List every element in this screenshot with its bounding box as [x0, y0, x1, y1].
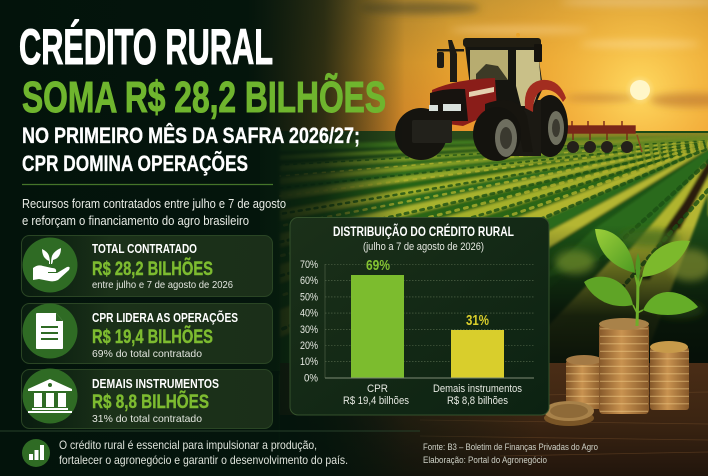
icon: bar chart — [29, 445, 44, 460]
background photo: wooden table — [280, 363, 708, 476]
footer note — [22, 438, 348, 467]
card: total contratado: TOTAL CONTRATADO — [92, 241, 197, 256]
card: demais instrumentos: 31% do total contratado — [92, 413, 202, 425]
bar chart: 40% — [300, 308, 318, 320]
category label: demais instrumentos: R$ 8,8 bilhões — [447, 395, 508, 407]
card: total contratado: R$ 28,2 BILHÕES — [92, 258, 213, 280]
coin stack: right — [650, 341, 689, 410]
bar chart — [300, 257, 534, 407]
card: CPR lidera as operações — [22, 304, 272, 364]
background photo: crop field — [260, 131, 708, 476]
bar chart: 10% — [300, 356, 318, 368]
card: CPR lidera as operações: CPR LIDERA AS OPERAÇÕES — [92, 310, 238, 325]
bar chart: 70% — [300, 259, 318, 271]
bar chart: 50% — [300, 291, 318, 303]
card: CPR lidera as operações: 69% do total contratado — [92, 348, 202, 360]
value: 69%: 69% — [366, 257, 390, 274]
category label: CPR: R$ 19,4 bilhões — [343, 395, 409, 407]
bar chart: 30% — [300, 324, 318, 336]
coin stacks and seedling — [544, 229, 698, 426]
bar: demais instrumentos — [451, 330, 504, 378]
category label: CPR — [343, 383, 409, 407]
category label: CPR: CPR — [367, 383, 388, 395]
card: total contratado: entre julho e 7 de agosto de 2026 — [92, 279, 233, 291]
table fade overlay — [280, 415, 540, 476]
background photo: tractor with implement — [395, 33, 642, 161]
source credits: Elaboração: Portal do Agronegócio — [423, 455, 547, 465]
intro text: e reforçam o financiamento do agro brasileiro — [22, 213, 249, 228]
title line 1: CRÉDITO RURAL — [19, 19, 273, 75]
flat coin — [544, 401, 594, 426]
tractor exhaust and mirror — [437, 40, 464, 82]
category label: demais instrumentos: Demais instrumentos — [433, 383, 522, 395]
subtitle line 2: CPR DOMINA OPERAÇÕES — [22, 151, 248, 176]
chart title: DISTRIBUIÇÃO DO CRÉDITO RURAL — [333, 224, 514, 239]
chart subtitle: (julho a 7 de agosto de 2026) — [363, 241, 484, 253]
card: CPR lidera as operações: R$ 19,4 BILHÕES — [92, 326, 213, 348]
dark left overlay — [0, 0, 450, 476]
source credits — [423, 442, 598, 465]
icon: bank building — [28, 379, 72, 413]
tractor hood — [412, 78, 566, 152]
title line 2: SOMA R$ 28,2 BILHÕES — [22, 72, 386, 122]
icon: document — [36, 313, 63, 349]
seedling — [584, 229, 698, 326]
icon: hand holding sprout — [33, 248, 70, 281]
card: demais instrumentos: R$ 8,8 BILHÕES — [92, 391, 209, 413]
tractor front-left wheel — [395, 108, 447, 160]
bar: CPR — [351, 275, 404, 378]
intro text: Recursos foram contratados entre julho e 7 de agosto — [22, 196, 286, 211]
card: demais instrumentos: DEMAIS INSTRUMENTOS — [92, 376, 219, 391]
category label: demais instrumentos — [433, 383, 522, 407]
tractor cab — [463, 33, 543, 110]
bar chart: 0% — [304, 372, 318, 384]
title — [19, 19, 386, 176]
chart panel — [290, 218, 549, 415]
bar chart: 60% — [300, 275, 318, 287]
tractor front-right wheel — [473, 107, 521, 161]
card: total contratado — [22, 236, 272, 296]
bar chart: 20% — [300, 340, 318, 352]
background photo: dark foliage behind seedling — [540, 225, 708, 365]
background photo: sky at sunset — [0, 0, 708, 140]
coin stack: center — [599, 318, 649, 414]
intro text — [22, 196, 286, 228]
coin stack: left — [566, 355, 602, 409]
footer note: fortalecer o agronegócio e garantir o desenvolvimento do país. — [59, 453, 348, 467]
source credits: Fonte: B3 – Boletim de Finanças Privadas do Agro — [423, 442, 598, 452]
tractor rear wheel — [532, 95, 568, 157]
value: 31%: 31% — [466, 312, 489, 329]
card: demais instrumentos — [22, 368, 272, 428]
subtitle line 1: NO PRIMEIRO MÊS DA SAFRA 2026/27; — [22, 123, 360, 148]
footer note: O crédito rural é essencial para impulsionar a produção, — [59, 438, 317, 452]
